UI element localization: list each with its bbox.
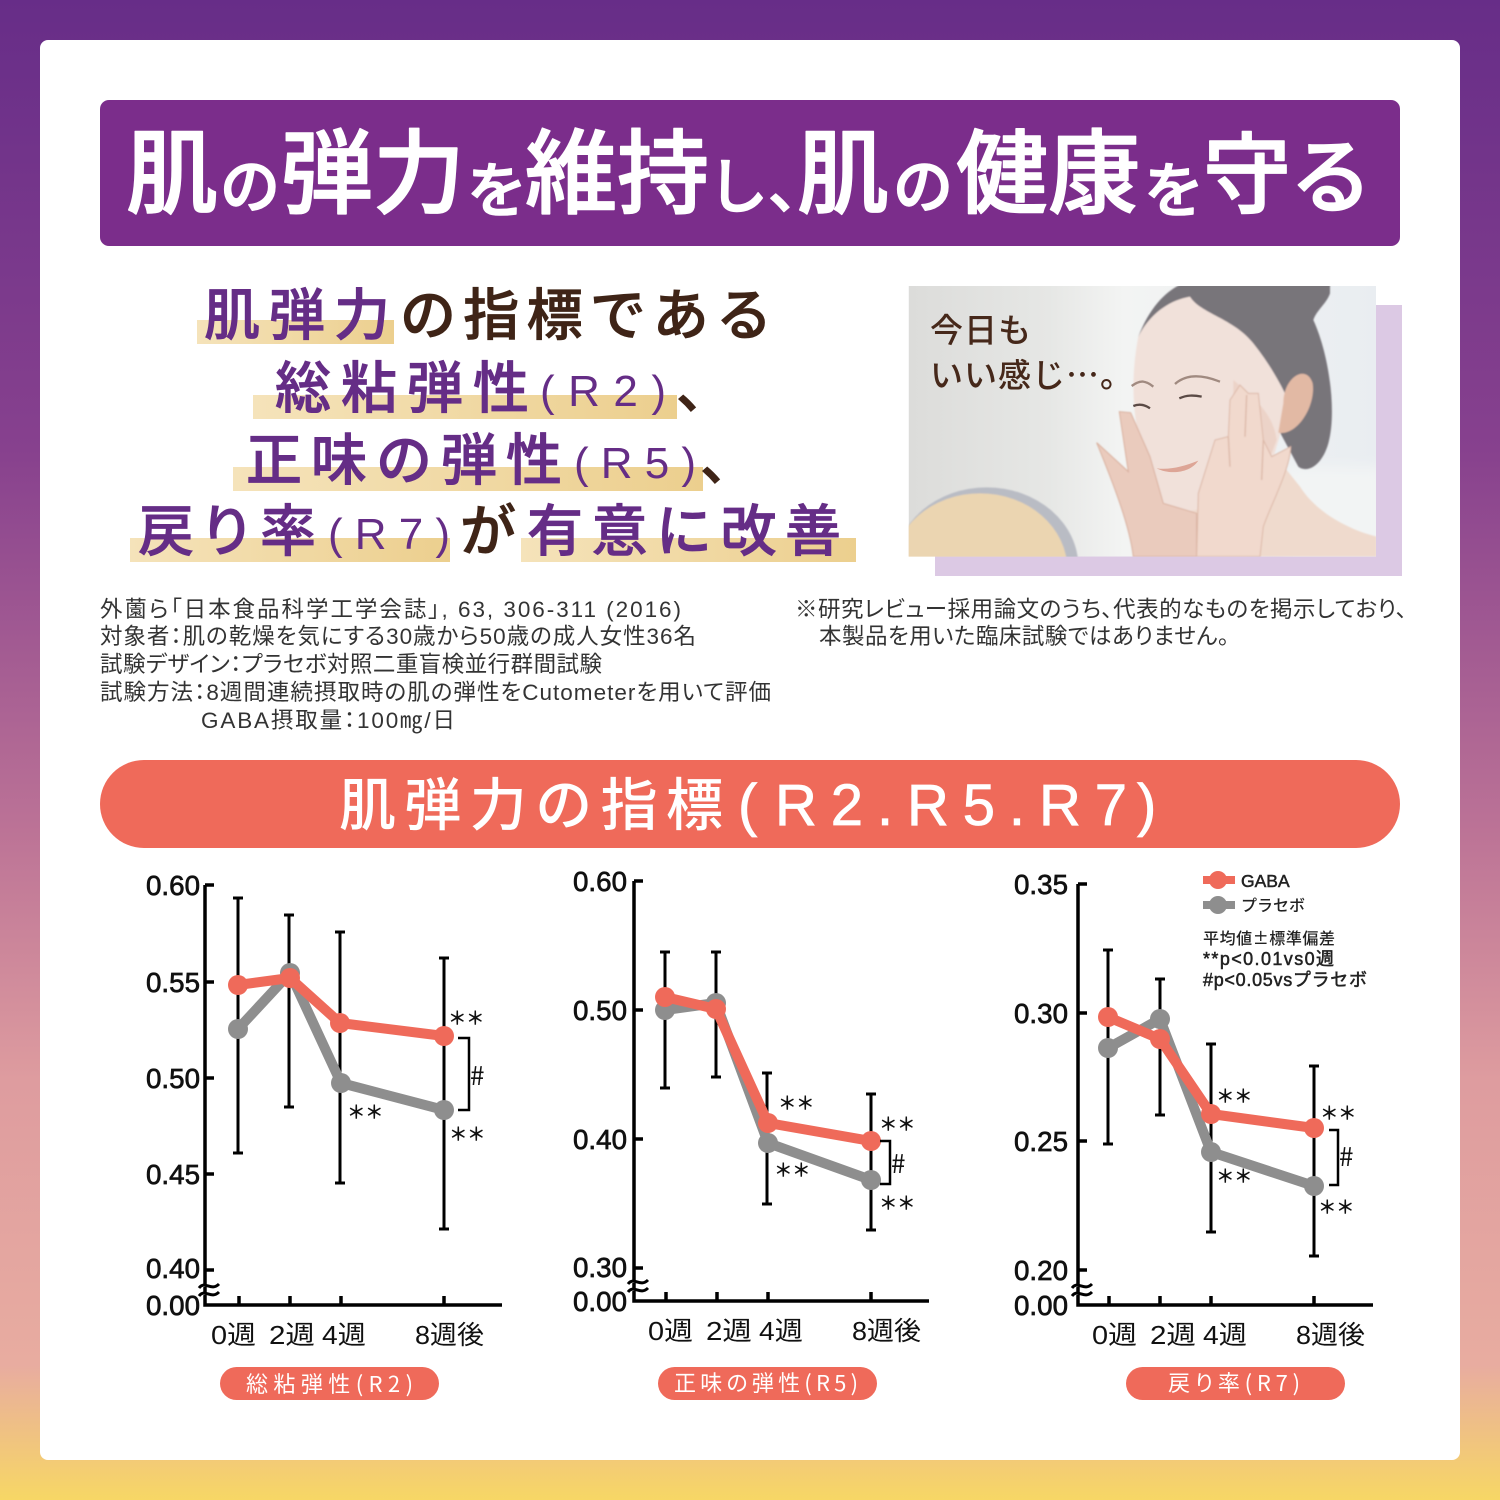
chart: R2: 0週 [211,1320,256,1350]
subheading with highlight bars: (R5) [574,439,696,488]
chart: R2: # [470,1056,484,1093]
title banner: 守 [1203,105,1291,232]
title banner: る [1290,111,1372,230]
chart: R2: 8週後 [415,1320,484,1350]
pill label: R7 [1126,1366,1345,1400]
lilac photo backing [935,305,1402,576]
speech text: 今日も [930,304,1032,352]
title banner: 肌 [126,100,218,233]
chart: R7: 4週 [1203,1320,1247,1350]
mirror [910,487,1078,557]
study citation notes: 試験方法：8週間連続摂取時の肌の弾性をCutometerを用いて評価 [100,680,771,705]
subheading with highlight bars: 総粘弾性 [275,344,529,425]
left hand [1097,412,1197,557]
chart: R7: 2週 [1150,1320,1196,1350]
chart: R5: ＊＊ [774,1157,810,1183]
speech text [930,304,1134,397]
title banner: を [1144,143,1204,230]
chart: R5: 4週 [759,1316,803,1346]
subheading with highlight bars: (R7) [328,510,450,559]
neck and shoulder [1183,453,1377,557]
chart: R5: ＊＊ [879,1111,915,1137]
chart: R7 [1014,869,1373,1350]
chart: R7: 0.00 [1014,1290,1068,1321]
legend: **p<0.01vs0週 [1203,949,1334,969]
chart: R5: ＊＊ [778,1090,814,1116]
title banner: 弾力 [281,100,465,233]
disclaimer note: 本製品を用いた臨床試験ではありません。 [819,624,1229,649]
disclaimer note [795,597,1407,649]
subheading with highlight bars: 戻り率 [138,487,316,568]
chart: R5: 0.40 [573,1124,627,1155]
chart: R5: # [891,1144,905,1181]
chart: R2: 0.45 [146,1159,200,1190]
study citation notes: 試験デザイン：プラセボ対照二重盲検並行群間試験 [100,652,602,677]
section banner: 肌弾力の指標 [339,760,723,842]
pill label: R2: 総粘弾性(R2) [246,1367,413,1399]
pill label: R5: 正味の弾性(R5) [674,1366,858,1398]
title banner: 健康 [956,100,1140,233]
chart: R2: 4週 [322,1320,366,1350]
title banner: 肌 [797,100,889,233]
chart: R2: 0.00 [146,1290,200,1321]
title banner: し、 [708,139,828,226]
chart: R7: 0週 [1092,1320,1137,1350]
section banner: ) [1137,773,1156,838]
subheading with highlight bars: (R2) [540,367,666,416]
section banner: R2.R5.R7 [775,773,1127,838]
chart: R2: 0.50 [146,1063,200,1094]
subheading with highlight bars: 有意に改善 [527,487,841,568]
chart: R5: 0週 [648,1316,693,1346]
chart: R7: # [1339,1137,1353,1174]
chart: R2: ＊＊ [347,1099,383,1125]
chart: R2 [146,870,502,1350]
hair [1138,283,1332,469]
chart: R2: ＊＊ [448,1005,484,1031]
chart: R5 [573,866,929,1346]
disclaimer note: ※研究レビュー採用論文のうち、代表的なものを掲示しており、 [795,597,1407,622]
study citation notes: 対象者：肌の乾燥を気にする30歳から50歳の成人女性36名 [100,624,696,649]
subheading with highlight bars: 、 [676,344,732,425]
section banner [100,760,1400,848]
chart: R5: 0.30 [573,1252,627,1283]
title banner: 維持 [525,100,709,233]
legend: プラセボ [1241,892,1305,916]
legend: #p<0.05vsプラセボ [1203,970,1367,990]
legend: 平均値±標準偏差 [1203,925,1335,949]
study citation notes [100,597,771,735]
chart: R5: 8週後 [852,1316,921,1346]
chart: R2: 2週 [269,1320,315,1350]
chart: R2: 0.40 [146,1253,200,1284]
chart: R7: ＊＊ [1320,1100,1356,1126]
section banner: ( [738,773,757,838]
legend [1203,871,1367,990]
finger lines [1228,395,1263,480]
chart: R5: 0.00 [573,1286,627,1317]
chart: R7: ＊＊ [1318,1194,1354,1220]
subheading with highlight bars: の指標である [400,271,772,352]
chart: R2: ＊＊ [449,1121,485,1147]
ear [1278,374,1313,433]
speech text: いい感じ…。 [930,349,1134,397]
study citation notes: 外薗ら「日本食品科学工学会誌」, 63, 306-311 (2016) [100,597,681,622]
chart: R2: 0.60 [146,870,200,901]
chart: R5: 0.60 [573,866,627,897]
chart: R7: ＊＊ [1216,1163,1252,1189]
chart: R7: 0.30 [1014,998,1068,1029]
chart: R7: 0.20 [1014,1255,1068,1286]
pill label: R7: 戻り率(R7) [1168,1366,1300,1398]
face [1134,297,1286,512]
subheading with highlight bars [130,271,856,568]
chart: R5: ＊＊ [879,1190,915,1216]
chart: R7: 0.35 [1014,869,1068,900]
cheek shade [1234,381,1276,454]
chart: R7: ＊＊ [1216,1083,1252,1109]
subheading with highlight bars: が [460,487,516,568]
brows eyes lips [1132,376,1220,387]
legend: GABA [1241,871,1290,891]
title banner: の [893,139,953,226]
right hand [1197,385,1291,557]
subheading with highlight bars: 正味の弾性 [246,416,562,497]
chart: R7: 0.25 [1014,1126,1068,1157]
title banner: の [220,139,280,226]
title banner [100,100,1400,246]
photo: woman touching her cheeks [908,286,1376,557]
chart: R7: 8週後 [1296,1320,1365,1350]
chart: R5: 2週 [706,1316,752,1346]
chart: R2: 0.55 [146,967,200,998]
study citation notes: GABA摂取量：100㎎/日 [201,708,455,735]
chart: R5: 0.50 [573,995,627,1026]
subheading with highlight bars: 、 [700,416,756,497]
subheading with highlight bars: 肌弾力 [204,271,390,352]
title banner: を [467,143,527,230]
